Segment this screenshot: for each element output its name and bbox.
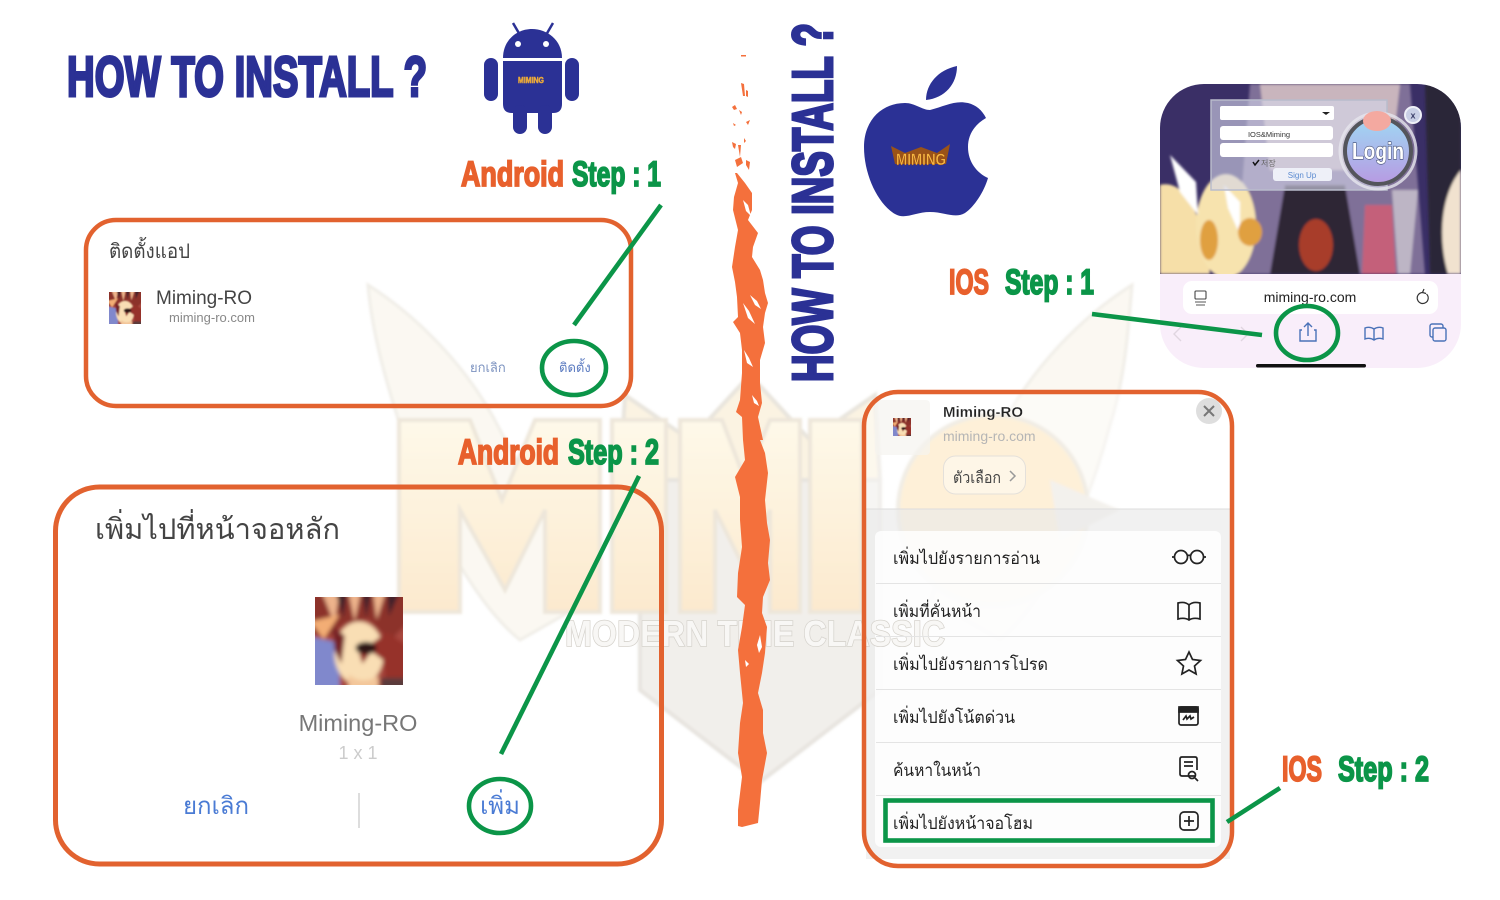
heading: android step 1: Step : 1 xyxy=(572,155,661,194)
panel: android step 1 install dialog xyxy=(86,220,631,406)
login dialog xyxy=(1211,100,1387,190)
panel: android step 2 add to home dialog: ยกเลิก xyxy=(183,793,249,820)
icon: apple logo xyxy=(864,66,988,216)
panel: ios step 2 share sheet xyxy=(864,392,1232,866)
callout: ios step 1 arrow and circle xyxy=(1092,306,1338,360)
callout: add to home highlight xyxy=(886,788,1280,840)
login button: Login xyxy=(1352,138,1404,164)
heading: ios step 1: Step : 1 xyxy=(1005,263,1094,302)
panel: android step 1 install dialog: miming-ro.com xyxy=(169,310,255,325)
share sheet header: Miming-RO xyxy=(943,404,1023,421)
panel: android step 2 add to home dialog: เพิ่มไปที่หน้าจอหลัก xyxy=(95,509,340,546)
heading: android step 2: Step : 2 xyxy=(568,433,659,472)
heading: android step 2 xyxy=(458,433,659,472)
panel: android step 1 install dialog: ติดตั้งแอป xyxy=(109,237,190,263)
heading: ios step 1 xyxy=(949,263,1094,302)
panel: ios browser screenshot xyxy=(1160,84,1461,368)
icon: glasses xyxy=(1172,550,1206,564)
icon: add to home xyxy=(1180,812,1198,830)
login dialog: IOS&Miming xyxy=(1248,130,1290,139)
panel: android step 2 add to home dialog xyxy=(55,487,662,864)
address bar xyxy=(1183,281,1438,314)
share sheet menu rows: เพิ่มไปยังรายการอ่าน xyxy=(893,546,1040,568)
login dialog: Sign Up xyxy=(1288,171,1317,180)
browser toolbar xyxy=(1160,274,1461,368)
icon: android robot: MIMING xyxy=(518,76,544,85)
panel: android step 2 add to home dialog: เพิ่ม xyxy=(480,789,520,820)
icon: apple logo: MIMING xyxy=(896,150,946,169)
callout: android step 2 arrow and circle xyxy=(469,476,639,833)
share sheet menu rows: เพิ่มไปยังหน้าจอโฮม xyxy=(893,811,1033,833)
share sheet menu rows xyxy=(876,546,1221,833)
toolbar icons xyxy=(1174,323,1446,341)
panel: android step 1 install dialog: ติดตั้ง xyxy=(559,358,591,375)
heading: android step 2: Android xyxy=(458,433,559,472)
icon: android robot xyxy=(484,23,579,134)
share sheet menu rows: เพิ่มไปยังโน้ตด่วน xyxy=(893,705,1015,727)
panel: android step 2 add to home dialog: 1 x 1 xyxy=(338,743,378,763)
heading: ios step 2: IOS xyxy=(1282,750,1322,789)
panel: android step 1 install dialog: ยกเลิก xyxy=(470,360,506,375)
background watermark logo xyxy=(368,285,1132,782)
share sheet menu rows: เพิ่มที่คั่นหน้า xyxy=(893,599,981,621)
login button: x xyxy=(1410,110,1416,120)
heading: ios step 2: Step : 2 xyxy=(1338,750,1429,789)
icon: book xyxy=(1178,602,1200,620)
heading: android step 1: Android xyxy=(461,155,564,194)
panel background: ios share sheet xyxy=(864,392,1232,866)
callout: android step 1 arrow and circle xyxy=(542,205,661,395)
share sheet menu rows: เพิ่มไปยังรายการโปรด xyxy=(893,652,1048,674)
title: how to install (android): HOW TO INSTALL ? xyxy=(67,45,427,109)
game login artwork xyxy=(1160,84,1461,278)
watermark tagline: MODERN TIME CLASSIC xyxy=(565,613,945,654)
icon: star xyxy=(1178,652,1200,674)
share sheet header: miming-ro.com xyxy=(943,428,1036,444)
heading: android step 1 xyxy=(461,155,661,194)
login dialog: 저장 xyxy=(1261,158,1276,168)
panel: android step 2 add to home dialog: Miming-RO xyxy=(299,710,417,736)
share sheet menu rows: ค้นหาในหน้า xyxy=(893,760,981,780)
panel: android step 1 install dialog: Miming-RO xyxy=(156,288,252,309)
icon: quick note xyxy=(1179,707,1198,725)
divider: torn orange brush stroke xyxy=(732,55,770,827)
share sheet header xyxy=(875,398,1222,494)
icon: find on page xyxy=(1180,757,1198,781)
share sheet header: ตัวเลือก xyxy=(953,469,1001,487)
heading: ios step 2 xyxy=(1282,750,1429,789)
address bar: miming-ro.com xyxy=(1264,289,1356,305)
heading: ios step 1: IOS xyxy=(949,263,989,302)
login button xyxy=(1340,107,1421,189)
